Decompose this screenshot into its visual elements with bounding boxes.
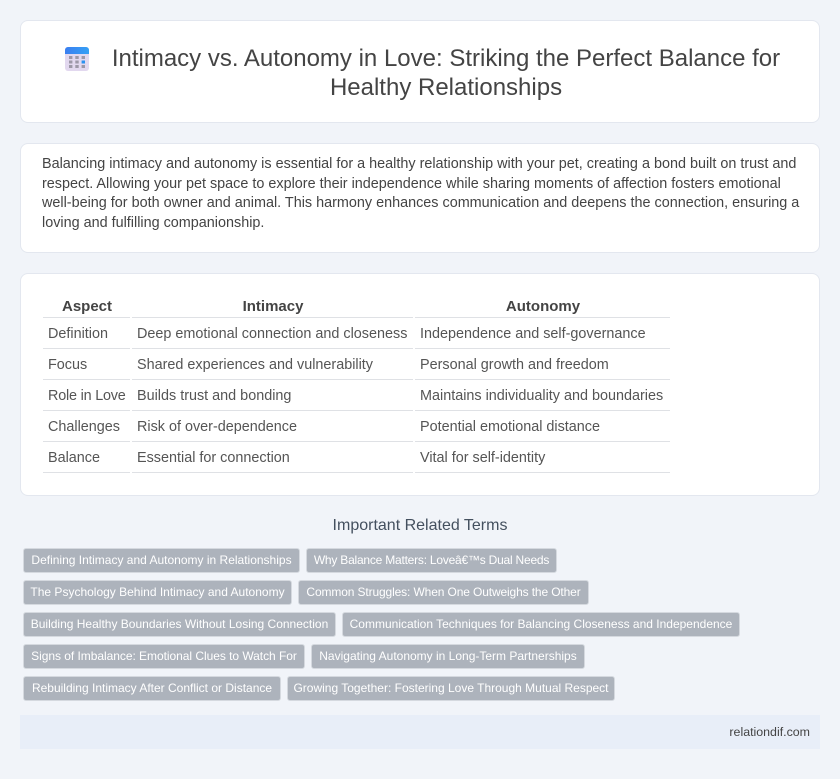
table header: Intimacy <box>243 298 303 315</box>
row: role in love: Maintains individuality and boundaries <box>420 388 663 404</box>
footer site name: relationdif.com <box>729 725 810 739</box>
row: balance <box>48 450 546 466</box>
row: definition: Definition <box>48 326 108 342</box>
icon: calendar <box>65 47 89 71</box>
tag <box>306 548 557 573</box>
row: role in love: Role in Love <box>48 388 126 404</box>
heading: important related terms: Important Related Terms <box>333 517 507 534</box>
row: focus: Shared experiences and vulnerability <box>137 357 373 373</box>
tag <box>23 676 281 701</box>
tag list <box>23 548 740 701</box>
tag: Defining Intimacy and Autonomy in Relationships <box>31 553 292 567</box>
table header <box>62 298 580 315</box>
row: definition <box>48 326 646 342</box>
row: challenges: Risk of over-dependence <box>137 419 297 435</box>
intro paragraph: loving and fulfilling companionship. <box>42 215 264 231</box>
row: focus <box>48 357 609 373</box>
row: balance: Essential for connection <box>137 450 290 466</box>
tag: Building Healthy Boundaries Without Losing Connection <box>31 617 328 631</box>
intro paragraph <box>42 156 800 231</box>
tag: Why Balance Matters: Loveâ€™s Dual Needs <box>314 553 549 567</box>
table header: Aspect <box>62 298 112 315</box>
tag: Communication Techniques for Balancing Closeness and Independence <box>350 617 732 631</box>
panel: comparison table <box>20 273 820 496</box>
intro paragraph: respect. Allowing your pet space to explore their independence while sharing moments of affection fosters emotional <box>42 176 781 192</box>
tag <box>342 612 740 637</box>
tag <box>311 644 585 669</box>
panel: intro text <box>20 143 820 253</box>
tag: Growing Together: Fostering Love Through Mutual Respect <box>293 681 609 695</box>
tag <box>23 548 300 573</box>
row: role in love: Builds trust and bonding <box>137 388 291 404</box>
tag: Signs of Imbalance: Emotional Clues to Watch For <box>31 649 297 663</box>
tag: Rebuilding Intimacy After Conflict or Distance <box>32 681 272 695</box>
tag: Common Struggles: When One Outweighs the Other <box>306 585 581 599</box>
tag <box>23 612 336 637</box>
row: role in love <box>48 388 663 404</box>
row: definition: Independence and self-governance <box>420 326 646 342</box>
row: balance: Balance <box>48 450 100 466</box>
footer <box>20 715 820 749</box>
intro paragraph: well-being for both owner and animal. This harmony enhances communication and deepens the connection, ensuring a <box>42 195 799 211</box>
row: challenges: Potential emotional distance <box>420 419 600 435</box>
panel: header <box>20 20 820 123</box>
row: balance: Vital for self-identity <box>420 450 545 466</box>
tag <box>23 580 292 605</box>
tag: Navigating Autonomy in Long-Term Partnerships <box>319 649 577 663</box>
row: definition: Deep emotional connection and closeness <box>137 326 407 342</box>
row: focus: Personal growth and freedom <box>420 357 609 373</box>
row: challenges: Challenges <box>48 419 120 435</box>
table header: Autonomy <box>506 298 580 315</box>
intro paragraph: Balancing intimacy and autonomy is essential for a healthy relationship with your pet, creating a bond built on trust and <box>42 156 796 172</box>
tag <box>298 580 589 605</box>
row: challenges <box>48 419 600 435</box>
title: Intimacy vs. Autonomy in Love: Striking the Perfect Balance for Healthy Relationships <box>112 45 780 101</box>
tag: The Psychology Behind Intimacy and Autonomy <box>30 585 285 599</box>
row: focus: Focus <box>48 357 87 373</box>
tag <box>287 676 615 701</box>
tag <box>23 644 305 669</box>
